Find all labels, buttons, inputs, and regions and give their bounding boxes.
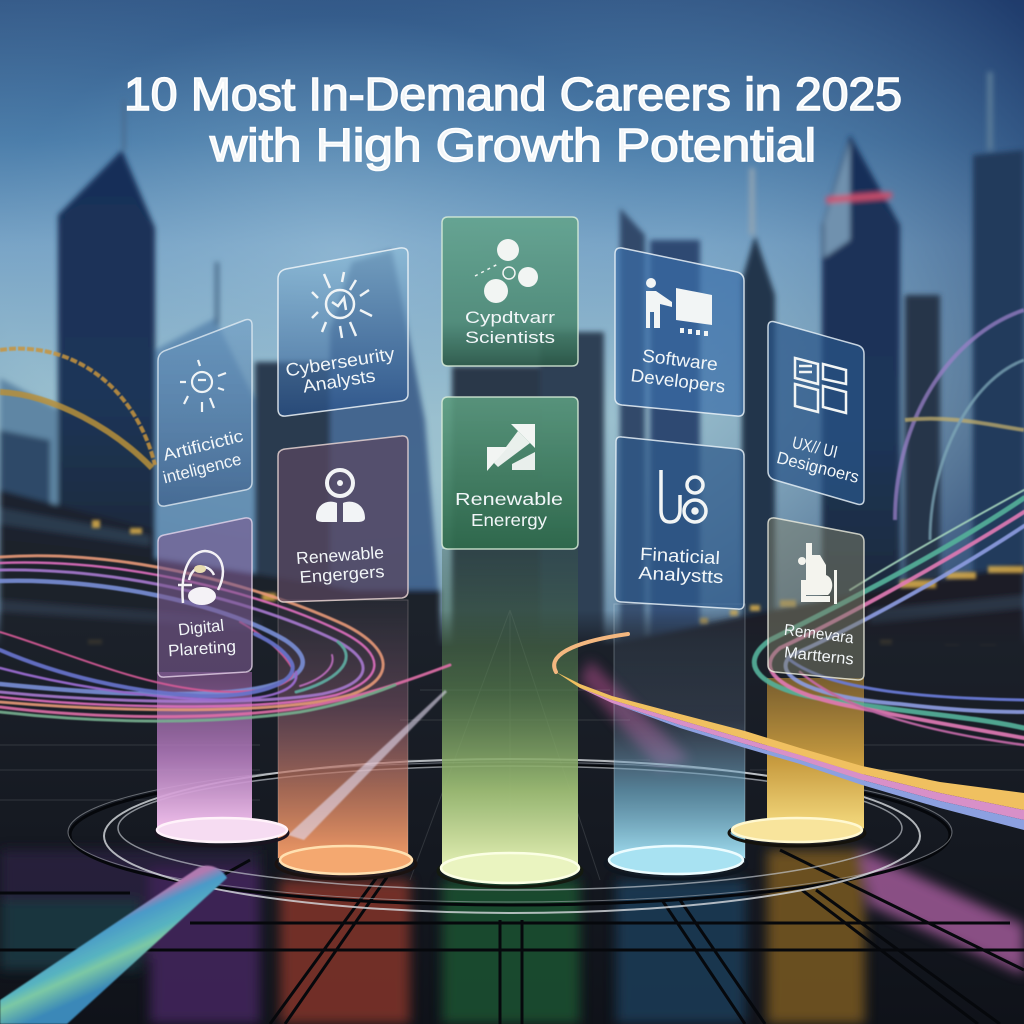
bright floor streak <box>288 690 447 840</box>
column: pink <box>157 672 252 832</box>
label: Financial Analysts: Analystts <box>638 563 724 587</box>
distant golden arches left <box>0 349 155 468</box>
panel: Data Scientists <box>442 217 578 366</box>
label: Renewable Engineers: Renewable <box>295 543 385 568</box>
label: Digital Marketing <box>168 617 237 660</box>
panel: Renewable Energy <box>442 397 578 549</box>
icon: figure at desk <box>798 543 837 604</box>
glowing column bases <box>156 818 865 887</box>
label: Financial Analysts <box>638 544 724 587</box>
distant neon arches right <box>895 310 1024 540</box>
perspective road lines <box>0 610 1024 880</box>
panel: Digital Marketing <box>158 518 252 677</box>
foreground tube lower left <box>0 866 227 1024</box>
icon: person <box>316 470 365 522</box>
reflective floor <box>0 610 1024 1024</box>
label: Cybersecurity Analysts: Cyberseurity <box>284 344 396 380</box>
icon: connected circles <box>475 239 538 303</box>
column: yellow <box>767 678 864 831</box>
label: Software Developers: Software <box>641 345 719 375</box>
label: Cybersecurity Analysts: Analysts <box>301 365 377 397</box>
light ribbon right: main sweep <box>554 634 1024 830</box>
title <box>124 68 902 171</box>
label: Renewable Engineers: Engergers <box>299 562 385 587</box>
light ribbons left <box>0 556 450 721</box>
light ribbons right: far sweep <box>754 490 1024 745</box>
panel: Cybersecurity Analysts <box>278 248 408 416</box>
label: Digital Marketing: Plareting <box>168 638 237 660</box>
panel: Renewable Engineers <box>278 436 408 602</box>
icon: head <box>178 551 223 605</box>
blurred city skyline <box>0 72 1024 700</box>
label: Software Developers <box>630 345 726 397</box>
label: UX/UI Designers: Designoers <box>775 448 861 487</box>
label: Financial Analysts: Finaticial <box>640 544 720 568</box>
panel: UX/UI Designers <box>768 322 864 504</box>
icon: linked glyphs <box>661 470 706 522</box>
label: Artificial Intelligence: Artificictic <box>161 426 246 465</box>
label: Data Scientists <box>465 308 555 347</box>
city window lights <box>88 520 1024 658</box>
label: Data Scientists: Scientists <box>465 328 555 347</box>
label: Digital Marketing: Digital <box>177 617 225 639</box>
background sky <box>0 0 1024 700</box>
label: Software Developers: Developers <box>630 365 726 397</box>
glass platform rings <box>68 759 952 913</box>
column: green <box>442 549 578 869</box>
label: Cybersecurity Analysts <box>284 344 396 397</box>
panel: Artificial Intelligence <box>158 320 252 506</box>
column: orange <box>278 600 408 862</box>
label: Marketing Managers: Martterns <box>783 644 855 669</box>
column: blue <box>614 604 745 862</box>
label: UX/UI Designers: UX// UI <box>790 433 839 462</box>
label: Marketing Managers: Remevara <box>783 622 855 647</box>
icon: cyber sun <box>312 272 372 338</box>
light columns <box>157 549 864 869</box>
title: 10 Most In-Demand Careers in 2025 <box>124 68 902 120</box>
label: Data Scientists: Cypdtvarr <box>465 308 555 327</box>
panel: Marketing Managers <box>768 518 864 680</box>
label: Artificial Intelligence <box>161 426 246 487</box>
icon: diagonal hourglass arrows <box>487 424 535 471</box>
label: Artificial Intelligence: inteligence <box>161 450 243 487</box>
title: with High Growth Potential <box>209 119 816 171</box>
sky vignette <box>0 0 1024 700</box>
icon: presenter and screen <box>646 278 712 336</box>
floor colour reflections <box>0 660 1024 1024</box>
panel: Financial Analysts <box>615 437 744 609</box>
icon: sun <box>180 360 226 412</box>
label: Renewable Energy: Renewable <box>455 489 563 509</box>
panel: Software Developers <box>615 248 744 416</box>
label: Renewable Energy <box>455 489 563 530</box>
icon: layout grid <box>795 358 846 413</box>
floor grid <box>0 850 1024 1024</box>
label: Renewable Energy: Enerergy <box>471 510 547 530</box>
label: Marketing Managers <box>783 622 855 669</box>
label: Renewable Engineers <box>295 543 385 587</box>
